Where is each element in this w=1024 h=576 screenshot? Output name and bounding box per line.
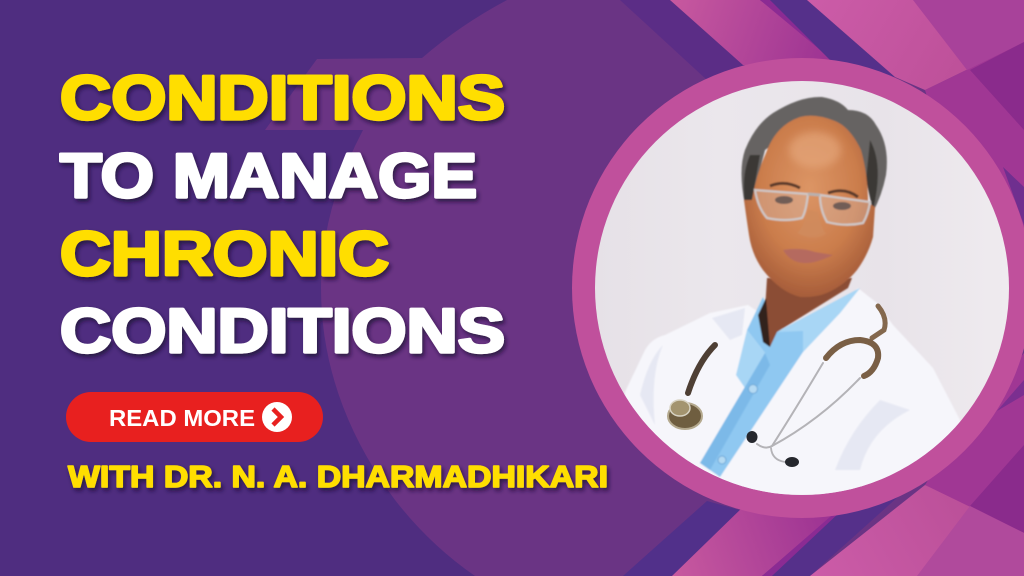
white coat [625,278,975,495]
presenter name: WITH DR. N. A. DHARMADHIKARI [68,459,608,494]
top right geometric shapes [620,0,1024,240]
title line 1: CONDITIONS [60,64,505,133]
title line 2: TO MANAGE [60,142,477,211]
glasses [755,190,870,225]
eyes [775,196,793,204]
photo backdrop [595,81,1009,495]
title line 4: CONDITIONS [60,297,505,366]
portrait of doctor [595,81,1009,495]
title [60,64,505,366]
face [744,116,875,297]
read more button [66,392,323,442]
nose [797,210,826,238]
icon: arrow circle [262,402,292,432]
title line 3: CHRONIC [60,220,389,289]
portrait ring [572,58,1024,518]
hair [742,97,887,212]
button label: READ MORE [109,405,255,431]
stethoscope [668,306,885,467]
blue shirt [709,297,804,478]
bottom right geometric shapes [623,353,1024,576]
neck [763,278,852,347]
mouth [783,249,833,263]
lighter background shape [265,0,1024,576]
shirt buttons [748,384,758,394]
head [742,97,887,297]
